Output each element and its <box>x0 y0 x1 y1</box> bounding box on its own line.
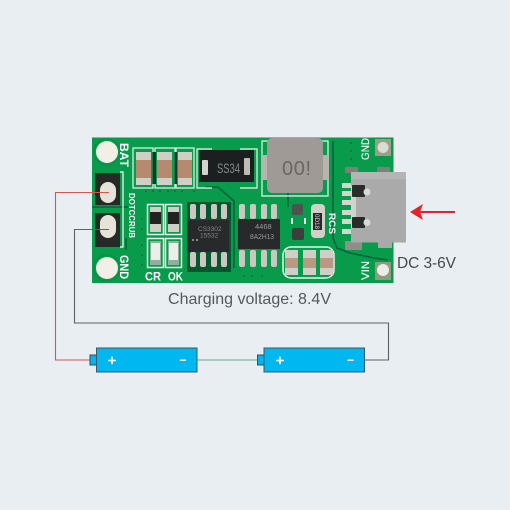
USB Type-C connector <box>351 172 406 242</box>
resistor: right <box>166 204 182 234</box>
small components near RCS <box>291 204 306 240</box>
arrow: input power <box>410 204 455 220</box>
label: OK: OK <box>168 272 184 284</box>
text: DC 3-6V: DC 3-6V <box>397 255 457 272</box>
resistor: RCS <box>311 204 325 238</box>
battery: right: + <box>276 352 285 370</box>
diode: SS34 <box>197 149 257 188</box>
label: BAT: BAT <box>117 143 129 167</box>
silkscreen bracket <box>120 172 123 247</box>
label: CR: CR <box>145 272 162 284</box>
diode: SS34: SS34 <box>217 161 240 176</box>
label: VIN: VIN <box>360 261 372 280</box>
LED: OK <box>166 238 182 268</box>
battery: right <box>258 348 364 372</box>
resistor: left <box>148 204 164 234</box>
chip: CS3302: CS3302 <box>198 226 222 233</box>
battery: left: + <box>108 352 117 370</box>
capacitors: bottom group <box>283 247 334 278</box>
text: charging voltage: Charging voltage: 8.4V <box>168 291 331 308</box>
label: DOTCCRUB: DOTCCRUB <box>127 193 137 238</box>
chip: CS3302: 15532 <box>200 232 218 240</box>
wire: red positive <box>56 192 109 360</box>
chip: 4468: 8A2H13 <box>250 232 274 241</box>
wire: black negative <box>74 230 388 360</box>
capacitors: top group <box>133 148 194 188</box>
battery pad: positive <box>95 173 120 205</box>
resistor: RCS: 0D18 <box>313 214 320 229</box>
chip: 4468 <box>238 204 280 267</box>
mounting pad: VIN bottom right <box>375 262 391 280</box>
chip: 4468: 4468 <box>255 222 272 231</box>
LED: CR <box>148 238 164 268</box>
label: RCS: RCS <box>326 213 337 234</box>
mounting pad: GND top right <box>375 139 391 156</box>
inductor <box>261 138 329 196</box>
chip: CS3302 <box>187 202 231 272</box>
mounting hole: bottom left <box>94 255 120 281</box>
mounting hole: top left <box>94 139 120 165</box>
wire: green series link <box>197 359 257 361</box>
battery pad: negative <box>95 213 120 247</box>
inductor: 00! <box>282 158 311 180</box>
panel: green circuit board <box>92 138 406 284</box>
connector pins <box>342 167 392 250</box>
battery: left <box>90 348 197 372</box>
label: GND right: GND <box>360 138 372 160</box>
label: GND left: GND <box>117 255 129 279</box>
